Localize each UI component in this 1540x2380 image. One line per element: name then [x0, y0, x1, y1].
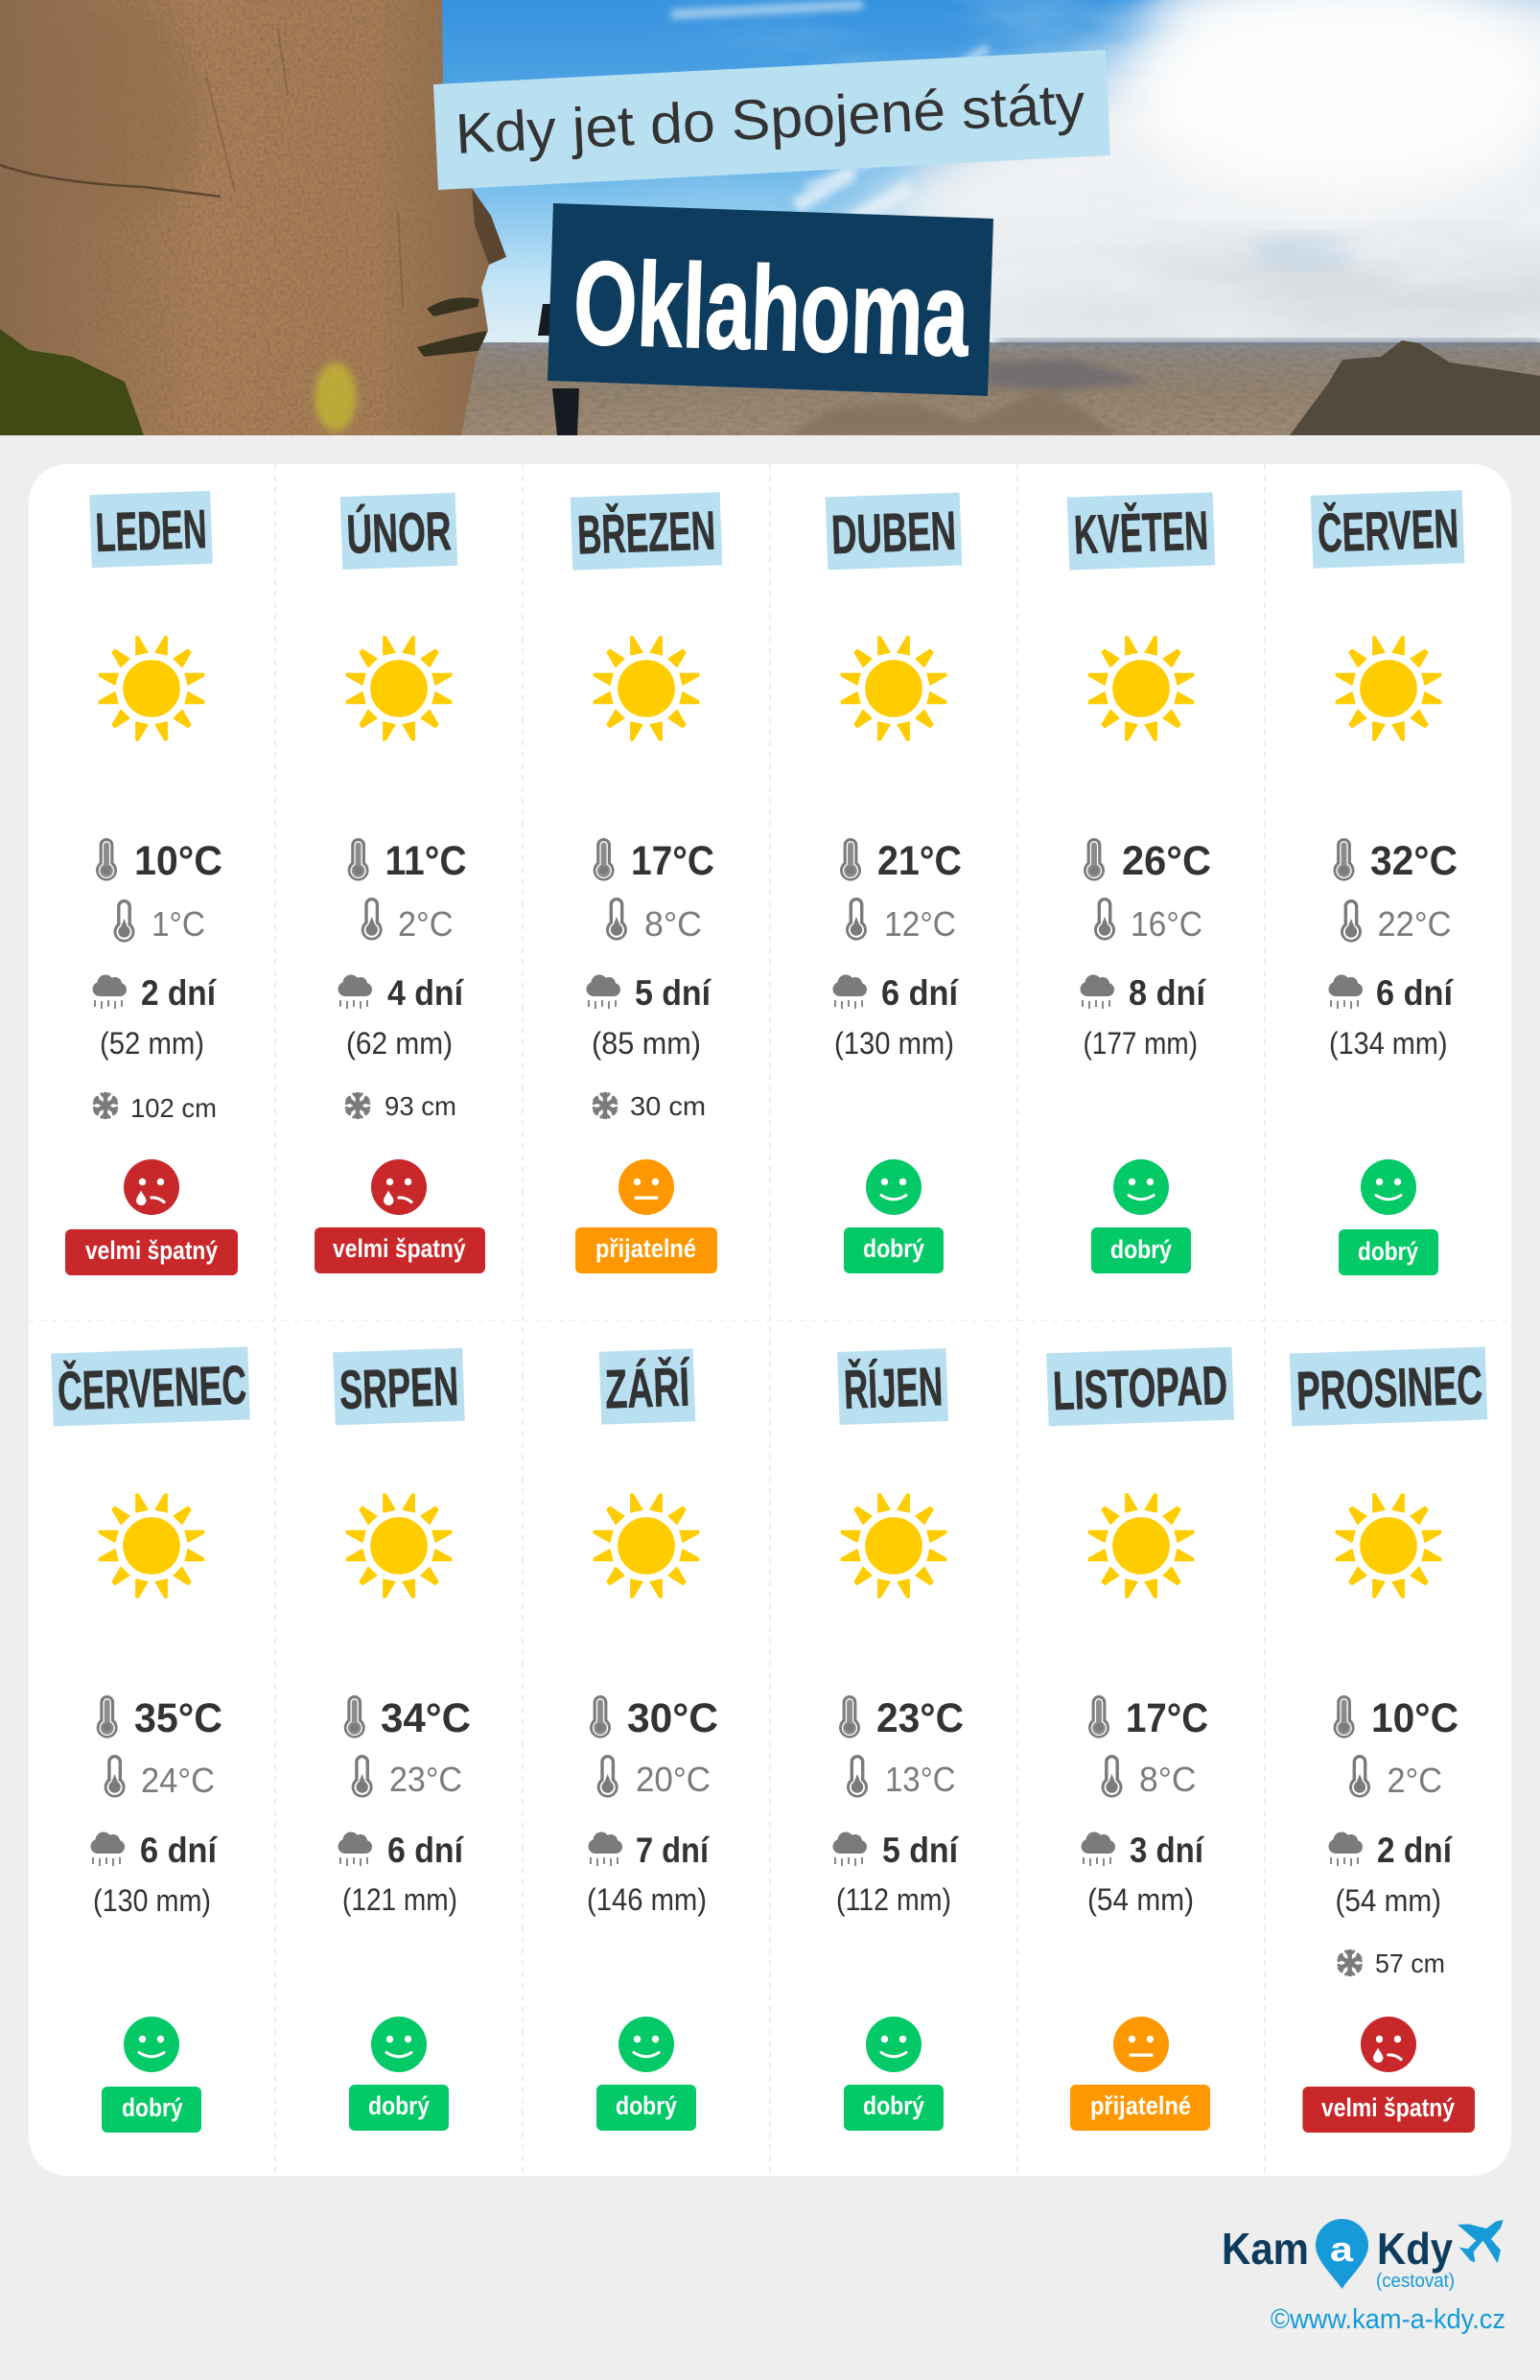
icon: rating face — [1113, 2017, 1169, 2072]
heading: červenec: ČERVENEC — [57, 1354, 247, 1422]
icon: sun — [841, 1494, 946, 1598]
icon: sun — [594, 637, 699, 740]
rating badge: dobrý — [368, 2091, 430, 2120]
precipitation: (130 mm) — [93, 1883, 211, 1918]
precipitation: (52 mm) — [100, 1026, 204, 1061]
heading: září: ZÁŘÍ — [604, 1355, 692, 1421]
heading: říjen — [837, 1348, 948, 1425]
precipitation: (121 mm) — [342, 1882, 457, 1917]
high temperature: 30°C — [627, 1695, 718, 1741]
rating badge — [575, 1227, 717, 1273]
rainy days: 2 dní — [141, 973, 218, 1013]
precipitation: (130 mm) — [834, 1026, 954, 1061]
icon: sun — [99, 637, 204, 740]
high temperature: 35°C — [134, 1695, 222, 1741]
low temperature — [1094, 898, 1202, 944]
rainy days — [90, 1831, 219, 1870]
rating badge — [315, 1227, 485, 1273]
rainy days: 3 dní — [1130, 1831, 1205, 1870]
rainy days: 5 dní — [635, 973, 712, 1013]
icon: rating face — [866, 1159, 922, 1215]
precipitation: (146 mm) — [587, 1882, 707, 1917]
snow depth: 57 cm — [1375, 1948, 1445, 1978]
low temperature: 1°C — [152, 904, 205, 944]
icon: sun — [346, 637, 452, 740]
low temperature — [113, 899, 205, 944]
heading: srpen — [333, 1348, 465, 1425]
low temperature: 22°C — [1377, 904, 1452, 944]
high temperature: 11°C — [385, 838, 466, 884]
icon: rating face — [618, 1159, 674, 1215]
rating badge — [102, 2087, 201, 2133]
icon: sun — [1336, 1494, 1441, 1598]
rating badge: dobrý — [616, 2091, 677, 2120]
rainy days — [1329, 1831, 1454, 1870]
high temperature — [1084, 838, 1211, 884]
icon: rating face — [124, 1159, 179, 1215]
heading: červen — [1311, 490, 1464, 569]
snow depth — [593, 1091, 706, 1121]
high temperature — [594, 838, 714, 884]
high temperature: 21°C — [877, 838, 962, 884]
rating badge: velmi špatný — [85, 1236, 218, 1265]
website url: ©www.kam-a-kdy.cz — [1271, 2304, 1505, 2335]
precipitation: (134 mm) — [1329, 1026, 1448, 1061]
icon: map pin: a — [1330, 2229, 1354, 2269]
rainy days: 6 dní — [140, 1831, 219, 1870]
icon: rating face — [1361, 2017, 1416, 2072]
icon: sun — [594, 1494, 699, 1598]
heading: květen: KVĚTEN — [1073, 500, 1209, 566]
heading: listopad: LISTOPAD — [1052, 1355, 1228, 1422]
high temperature — [840, 838, 962, 884]
rating badge — [1339, 1229, 1438, 1275]
high temperature — [97, 1695, 222, 1741]
panel: červenec — [51, 1346, 250, 2133]
icon: sun — [1088, 637, 1194, 740]
rating badge: přijatelné — [1090, 2091, 1191, 2120]
logo: Kam a Kdy: Kam — [1222, 2224, 1309, 2274]
high temperature: 17°C — [631, 838, 714, 884]
heading: březen — [571, 492, 722, 571]
rating badge — [596, 2085, 696, 2131]
rainy days — [338, 973, 465, 1013]
low temperature: 2°C — [398, 904, 453, 944]
panel: srpen — [333, 1348, 471, 2131]
rating badge — [1302, 2087, 1475, 2133]
rating badge — [1091, 1227, 1191, 1273]
low temperature — [1349, 1755, 1442, 1800]
logo: Kam a Kdy: Kdy — [1377, 2224, 1453, 2274]
low temperature — [105, 1755, 215, 1800]
high temperature — [344, 1695, 471, 1741]
low temperature: 2°C — [1387, 1761, 1442, 1800]
precipitation: (62 mm) — [346, 1026, 453, 1061]
high temperature — [839, 1695, 964, 1741]
snow depth — [1338, 1948, 1445, 1978]
rating badge — [349, 2085, 449, 2131]
panel: listopad — [1046, 1347, 1234, 2131]
rainy days — [92, 973, 218, 1013]
panel: leden — [65, 491, 238, 1275]
low temperature: 20°C — [636, 1760, 711, 1799]
icon: sun — [1336, 637, 1441, 740]
icon: sun — [99, 1494, 204, 1598]
high temperature — [1088, 1695, 1208, 1741]
icon: rating face — [618, 2017, 674, 2072]
low temperature: 23°C — [389, 1760, 462, 1799]
rating badge — [844, 2085, 944, 2131]
heading: leden: LEDEN — [94, 499, 208, 564]
precipitation: (54 mm) — [1087, 1882, 1194, 1917]
rating badge: dobrý — [863, 2091, 924, 2120]
heading: říjen: ŘÍJEN — [843, 1355, 944, 1421]
rainy days — [832, 973, 960, 1013]
panel: květen — [1067, 492, 1215, 1273]
rating badge: dobrý — [1110, 1235, 1172, 1264]
snow depth — [345, 1091, 456, 1121]
low temperature — [1101, 1755, 1197, 1799]
precipitation: (177 mm) — [1084, 1026, 1198, 1061]
icon: rating face — [866, 2017, 922, 2072]
icon: sun — [1088, 1494, 1194, 1598]
panel: březen — [571, 492, 722, 1273]
low temperature: 13°C — [885, 1760, 955, 1799]
icon: rating face — [371, 2017, 427, 2072]
logo: Kam a Kdy: (cestovat) — [1376, 2271, 1455, 2292]
heading: září — [599, 1348, 695, 1425]
banner: Oklahoma: Oklahoma — [572, 237, 971, 382]
icon: map pin — [1316, 2219, 1368, 2289]
low temperature: 8°C — [644, 904, 702, 944]
low temperature: 16°C — [1131, 904, 1202, 944]
icon: rating face — [371, 1159, 427, 1215]
high temperature — [96, 838, 222, 884]
high temperature: 10°C — [1371, 1695, 1458, 1741]
icon: rating face — [124, 2017, 179, 2072]
rating badge: dobrý — [122, 2093, 183, 2122]
high temperature — [1334, 1695, 1458, 1741]
rainy days — [338, 1831, 465, 1870]
heading: duben: DUBEN — [830, 501, 957, 566]
panel: únor — [315, 493, 485, 1273]
high temperature: 34°C — [381, 1695, 471, 1741]
high temperature: 10°C — [134, 838, 222, 884]
heading: únor — [340, 493, 457, 570]
heading: listopad — [1046, 1347, 1234, 1426]
low temperature: 24°C — [141, 1761, 215, 1800]
precipitation: (54 mm) — [1335, 1883, 1441, 1918]
icon: sun — [841, 637, 946, 740]
panel: duben — [826, 493, 962, 1273]
heading: březen: BŘEZEN — [576, 500, 716, 566]
icon: rating face — [1113, 1159, 1169, 1215]
rainy days: 8 dní — [1129, 973, 1207, 1013]
snow depth — [93, 1092, 217, 1123]
panel: climate table card — [29, 464, 1511, 2176]
rating badge — [1070, 2085, 1210, 2131]
panel: prosinec — [1290, 1346, 1487, 2133]
low temperature — [846, 898, 956, 944]
panel: červen — [1311, 490, 1464, 1275]
precipitation: (112 mm) — [836, 1882, 951, 1917]
rating badge: přijatelné — [595, 1234, 696, 1263]
banner: Kdy jet do Spojené státy: Kdy jet do Spojené státy — [454, 72, 1086, 166]
snow depth: 102 cm — [130, 1093, 217, 1123]
low temperature: 12°C — [884, 904, 956, 944]
rainy days — [1329, 973, 1455, 1013]
high temperature — [348, 838, 466, 884]
banner: Kdy jet do Spojené státy — [433, 50, 1110, 190]
heading: leden — [89, 491, 213, 568]
precipitation: (85 mm) — [592, 1026, 701, 1061]
rating badge: dobrý — [1358, 1237, 1418, 1266]
rainy days — [589, 1831, 711, 1870]
low temperature — [362, 898, 453, 944]
rainy days: 6 dní — [387, 1831, 465, 1870]
hero photo: rock, sky and plains — [0, 0, 1540, 435]
rainy days — [1080, 973, 1207, 1013]
heading: duben — [826, 493, 962, 570]
panel: září — [587, 1348, 718, 2131]
icon: airplane — [1458, 2220, 1504, 2263]
rainy days: 6 dní — [1376, 973, 1455, 1013]
rainy days: 5 dní — [882, 1831, 960, 1870]
rainy days — [1082, 1831, 1205, 1870]
high temperature: 17°C — [1126, 1695, 1208, 1741]
low temperature — [1341, 899, 1452, 944]
low temperature — [597, 1755, 711, 1799]
rating badge — [65, 1229, 238, 1275]
high temperature: 26°C — [1122, 838, 1211, 884]
low temperature — [352, 1755, 462, 1799]
heading: květen — [1067, 492, 1215, 571]
high temperature — [1333, 838, 1458, 884]
snow depth: 30 cm — [630, 1091, 706, 1121]
rating badge: velmi špatný — [333, 1234, 466, 1263]
panel: říjen — [832, 1348, 964, 2131]
banner: Oklahoma — [548, 203, 993, 396]
logo: Kam a Kdy — [1222, 2219, 1504, 2292]
rainy days — [832, 1831, 960, 1870]
rainy days: 2 dní — [1377, 1831, 1454, 1870]
rainy days — [587, 973, 712, 1013]
low temperature — [847, 1755, 955, 1799]
heading: únor: ÚNOR — [345, 501, 453, 566]
rainy days: 4 dní — [387, 973, 465, 1013]
rating badge: velmi špatný — [1321, 2093, 1455, 2122]
low temperature: 8°C — [1139, 1760, 1197, 1799]
icon: sun — [346, 1494, 452, 1598]
icon: rating face — [1361, 1159, 1416, 1215]
high temperature: 23°C — [876, 1695, 964, 1741]
heading: červenec — [51, 1346, 250, 1427]
rating badge: dobrý — [863, 1234, 924, 1263]
heading: červen: ČERVEN — [1317, 497, 1459, 565]
heading: srpen: SRPEN — [338, 1356, 459, 1421]
rating badge — [844, 1227, 944, 1273]
rainy days: 6 dní — [881, 973, 960, 1013]
snow depth: 93 cm — [385, 1091, 456, 1121]
rainy days: 7 dní — [636, 1831, 711, 1870]
high temperature: 32°C — [1370, 838, 1458, 884]
low temperature — [606, 898, 702, 944]
